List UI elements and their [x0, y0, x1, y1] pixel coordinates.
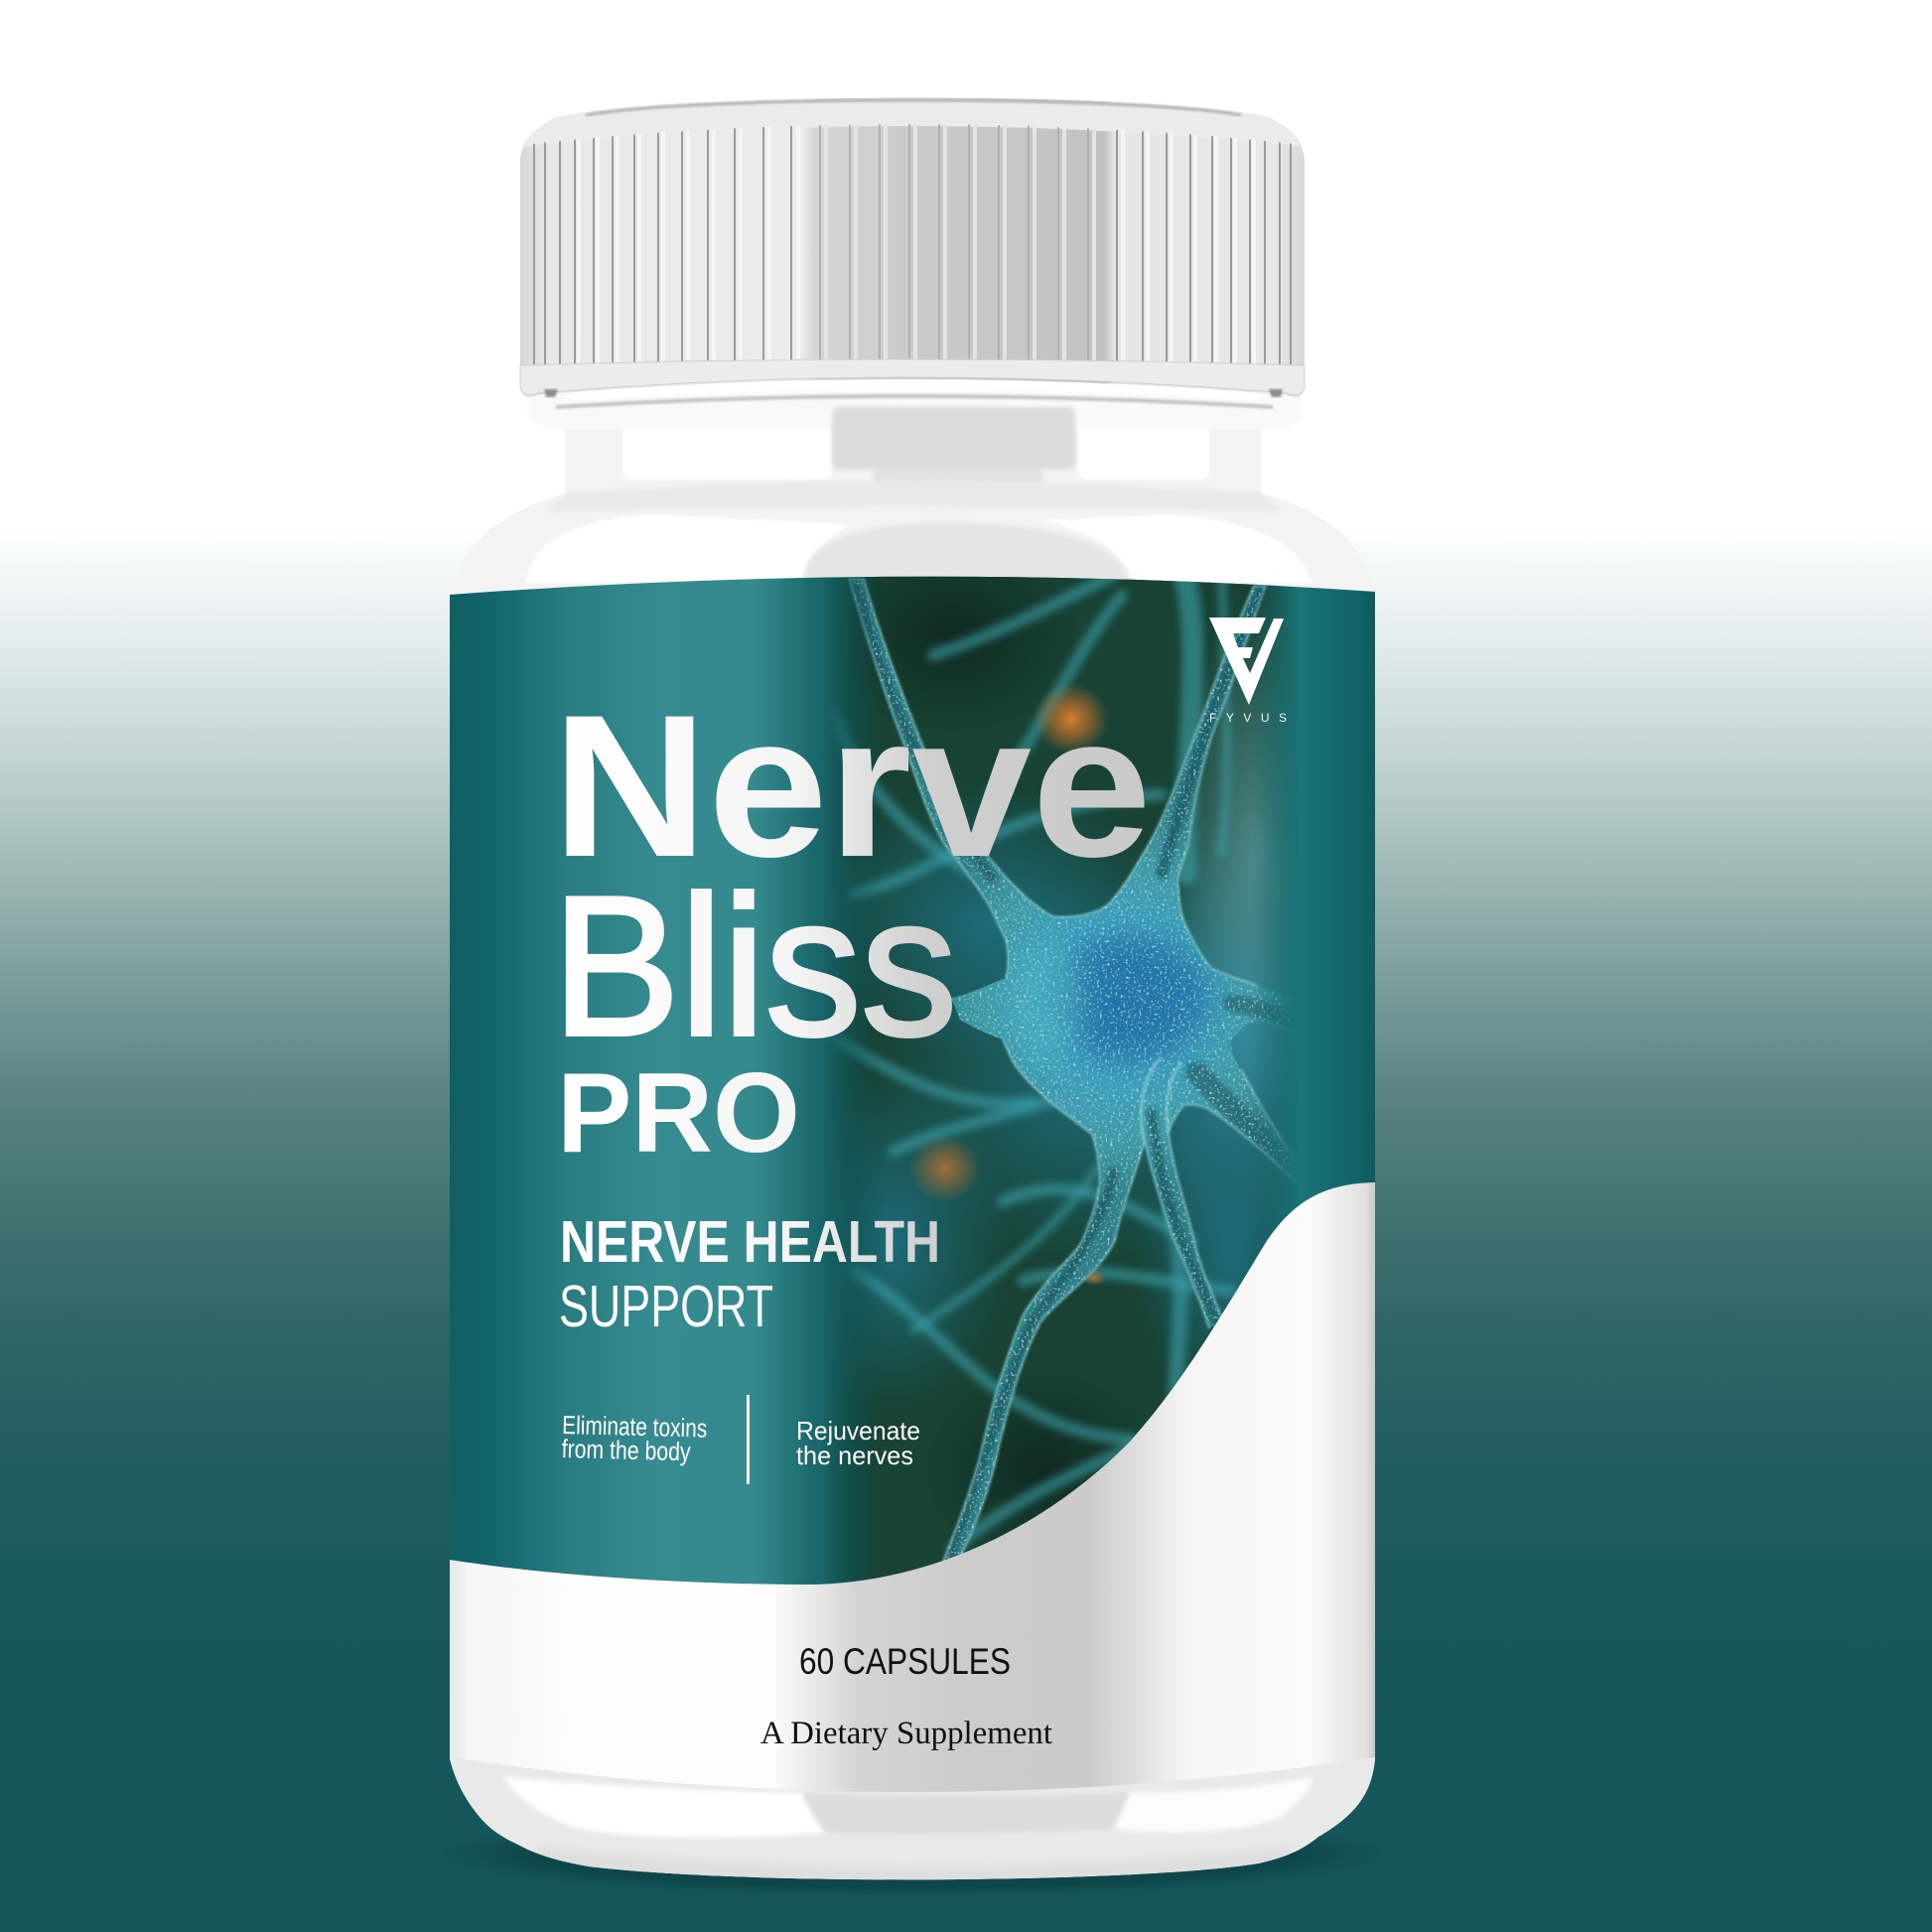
divider line — [747, 1395, 750, 1484]
benefit: rejuvenate the nerves — [796, 1416, 920, 1470]
cap top rim — [522, 99, 1303, 147]
benefit: rejuvenate the nerves: the nerves — [796, 1441, 913, 1470]
soma centre — [1054, 936, 1209, 1059]
benefit: eliminate toxins: from the body — [561, 1434, 691, 1466]
neuron artwork — [834, 576, 1295, 1584]
cap top rim line — [586, 100, 1241, 115]
label white base — [450, 577, 1375, 1792]
title line: Nerve: Nerve — [552, 673, 1152, 899]
cap silhouette — [520, 97, 1305, 397]
logo symbol — [1209, 618, 1284, 705]
neuron cell — [834, 566, 1311, 1579]
orange glows — [1034, 683, 1109, 755]
bottle — [437, 97, 1390, 1896]
bottle body — [437, 412, 1390, 1896]
neuron rim — [849, 579, 1297, 1567]
title line: Bliss: Bliss — [552, 856, 957, 1077]
product title — [552, 673, 1152, 1339]
floor shadow — [436, 1813, 1389, 1896]
capsule count: 60 CAPSULES — [799, 1641, 1011, 1682]
neck centre patch — [832, 407, 1075, 470]
neck ring highlight — [566, 375, 1261, 400]
subtitle: Nerve Health: NERVE HEALTH — [560, 1209, 940, 1275]
benefit: rejuvenate the nerves: Rejuvenate — [796, 1416, 920, 1446]
cap skirt notches — [544, 389, 1283, 397]
benefit: eliminate toxins: Eliminate toxins — [562, 1410, 708, 1444]
neck ring — [528, 387, 1301, 429]
soma light patch — [1016, 951, 1095, 1052]
subtitle: Support: SUPPORT — [559, 1274, 773, 1339]
blurred background filaments — [824, 566, 1231, 1549]
label teal panel — [450, 536, 1375, 1598]
inner dendrite split — [1141, 1057, 1181, 1142]
title line: PRO: PRO — [557, 1050, 800, 1176]
logo wordmark: FYVUS — [1209, 711, 1287, 725]
cap ribs — [533, 124, 1292, 365]
cap lower skirt — [520, 359, 1305, 395]
benefit: eliminate toxins — [561, 1410, 708, 1467]
cap — [520, 97, 1305, 397]
logo: Fyvus mark — [1209, 618, 1287, 725]
dietary supplement line: A Dietary Supplement — [760, 1716, 1052, 1751]
neck ring line — [556, 394, 1273, 409]
dendrite cores — [856, 586, 1291, 1564]
